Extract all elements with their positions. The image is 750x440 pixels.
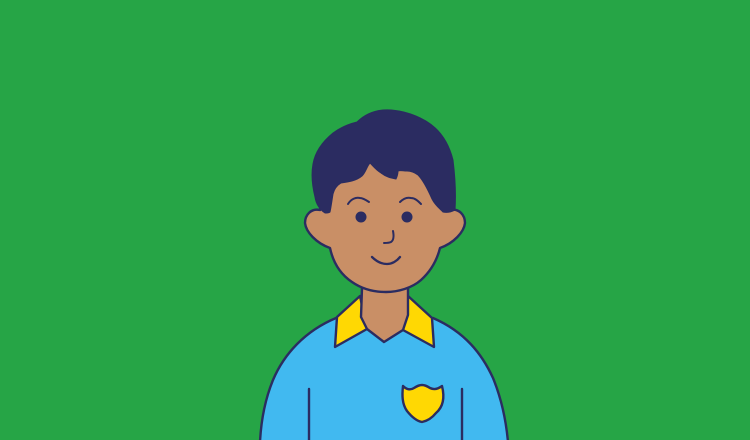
collar: left [335, 296, 367, 347]
character: boy [260, 110, 508, 440]
mouth [372, 257, 400, 264]
left eyebrow [348, 198, 369, 204]
right eye [402, 212, 412, 222]
right eyebrow [400, 198, 421, 204]
badge: yellow shield [402, 385, 443, 422]
hair [312, 110, 455, 213]
nose [384, 231, 394, 243]
collar: right [403, 296, 434, 347]
neck [361, 288, 408, 342]
shirt [260, 318, 508, 440]
head: face and ears [305, 150, 465, 292]
shirt fold lines [309, 389, 462, 440]
left eye [356, 212, 366, 222]
